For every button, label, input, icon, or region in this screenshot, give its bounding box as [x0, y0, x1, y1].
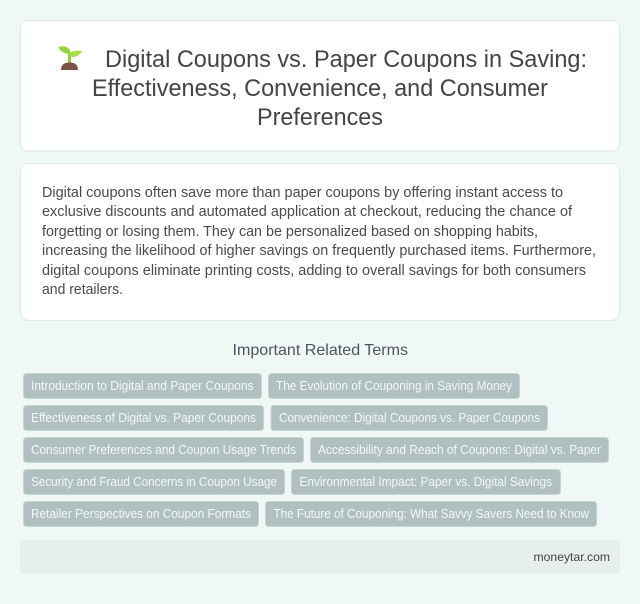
tag: retailer: Retailer Perspectives on Coupon Formats — [31, 507, 251, 521]
tag: future — [266, 502, 596, 526]
paragraph text — [42, 185, 596, 298]
paragraph text: and retailers. — [42, 282, 123, 298]
tag: consumer preferences — [24, 438, 304, 462]
footer: moneytar.com — [534, 550, 610, 564]
heading: important related terms: Important Related Terms — [232, 342, 408, 359]
tag: security: Security and Fraud Concerns in Coupon Usage — [31, 475, 277, 489]
paragraph text: exclusive discounts and automated application at checkout, reducing the chance of — [42, 204, 573, 220]
title text: Preferences — [257, 104, 383, 131]
tag: convenience — [271, 406, 548, 430]
tag: effectiveness — [24, 406, 264, 430]
tag: security — [24, 470, 284, 494]
panel: summary paragraph — [20, 164, 620, 320]
footer — [20, 540, 620, 574]
tag: introduction — [24, 374, 262, 398]
paragraph text: increasing the likelihood of higher savings on frequently purchased items. Furthermore, — [42, 243, 596, 259]
title text: Effectiveness, Convenience, and Consumer — [92, 75, 548, 102]
tag: retailer — [24, 502, 258, 526]
icon: seedling — [58, 46, 82, 70]
title text: Digital Coupons vs. Paper Coupons in Saving: — [105, 46, 587, 73]
paragraph text: digital coupons eliminate printing costs, adding to overall savings for both consumers — [42, 263, 586, 279]
tag: environmental — [292, 470, 560, 494]
title text — [92, 46, 587, 131]
tag: introduction: Introduction to Digital and Paper Coupons — [31, 379, 254, 393]
tag: evolution — [268, 374, 520, 398]
tag: environmental: Environmental Impact: Paper vs. Digital Savings — [300, 475, 552, 489]
paragraph text: Digital coupons often save more than paper coupons by offering instant access to — [42, 185, 563, 201]
tag: accessibility: Accessibility and Reach of Coupons: Digital vs. Paper — [318, 443, 601, 457]
paragraph text: forgetting or losing them. They can be personalized based on shopping habits, — [42, 224, 538, 240]
panel: title — [20, 20, 620, 151]
tag: future: The Future of Couponing: What Savvy Savers Need to Know — [274, 507, 590, 521]
tag: effectiveness: Effectiveness of Digital vs. Paper Coupons — [31, 411, 256, 425]
related terms tags — [24, 374, 608, 526]
tag: consumer preferences: Consumer Preferences and Coupon Usage Trends — [31, 443, 296, 457]
tag: accessibility — [310, 438, 608, 462]
tag: convenience: Convenience: Digital Coupons vs. Paper Coupons — [279, 411, 540, 425]
tag: evolution: The Evolution of Couponing in Saving Money — [276, 379, 513, 393]
